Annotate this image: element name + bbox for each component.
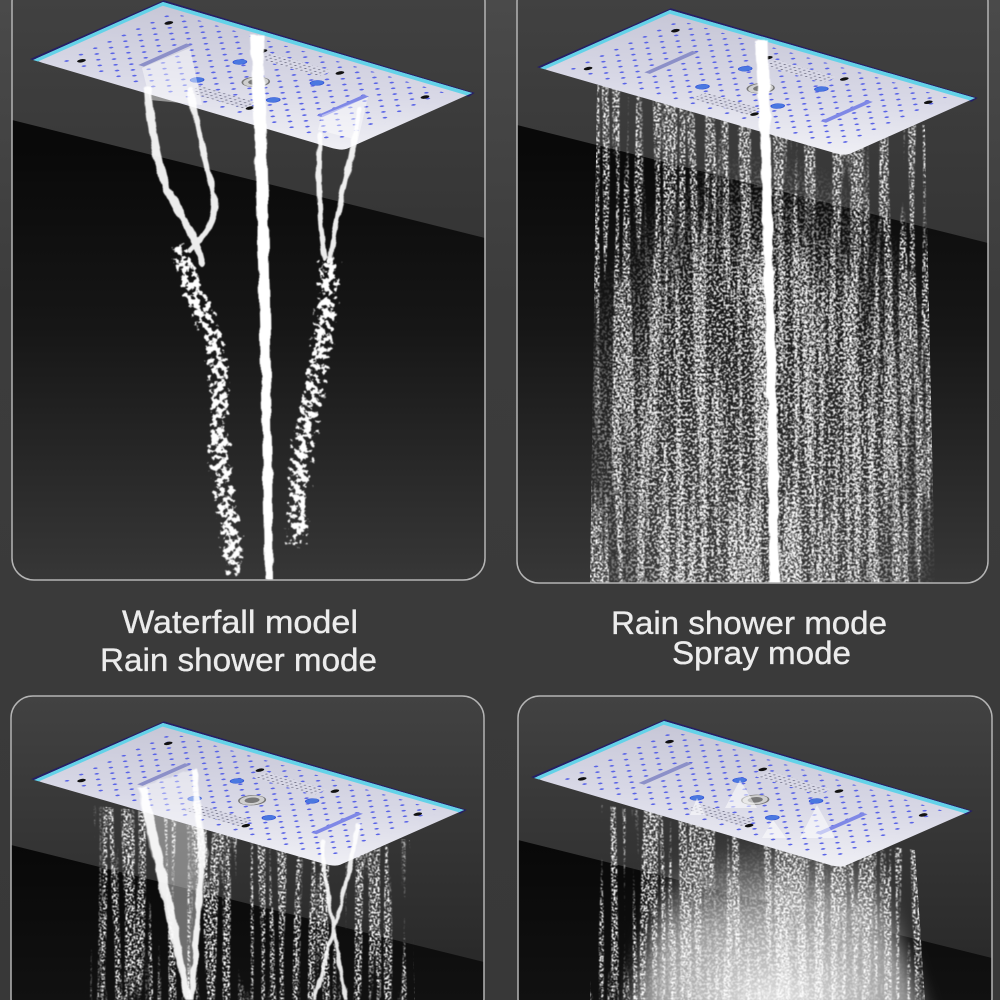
center water column (755, 40, 779, 583)
panel: rain shower and spray (517, 0, 988, 590)
waterfall stream: right (319, 110, 360, 262)
rain columns (590, 804, 925, 1000)
panel: waterfall curtain and rain (11, 696, 484, 1000)
caption: waterfall and rain shower (100, 604, 377, 678)
waterfall stream: center (250, 35, 273, 580)
shower head (31, 721, 470, 868)
panel border (11, 696, 484, 1000)
splash: left (178, 240, 236, 580)
waterfall curtain: left (138, 768, 208, 1000)
panel border (518, 696, 992, 1000)
mist cloud (620, 846, 934, 1000)
shower head (30, 0, 478, 152)
panel border (517, 0, 988, 583)
rain columns (590, 85, 934, 582)
shower head (537, 8, 981, 157)
rain columns (90, 806, 415, 1000)
panel: rain and mist (518, 696, 992, 1000)
waterfall stream: left (148, 90, 215, 262)
caption: rain shower and spray (611, 605, 887, 671)
panel border (12, 0, 485, 580)
waterfall curtain: right (314, 825, 358, 1000)
spray cones (690, 780, 835, 838)
caption: rain shower and spray: Rain shower mode (611, 605, 887, 641)
splash: right (294, 250, 329, 550)
curtain glow on plate (142, 48, 368, 140)
caption: waterfall and rain shower: Rain shower mode (100, 642, 377, 678)
caption: rain shower and spray: Spray mode (672, 635, 851, 671)
caption: waterfall and rain shower: Waterfall model (122, 604, 358, 640)
shower head (531, 719, 976, 869)
panel: waterfall and rain shower (12, 0, 485, 580)
